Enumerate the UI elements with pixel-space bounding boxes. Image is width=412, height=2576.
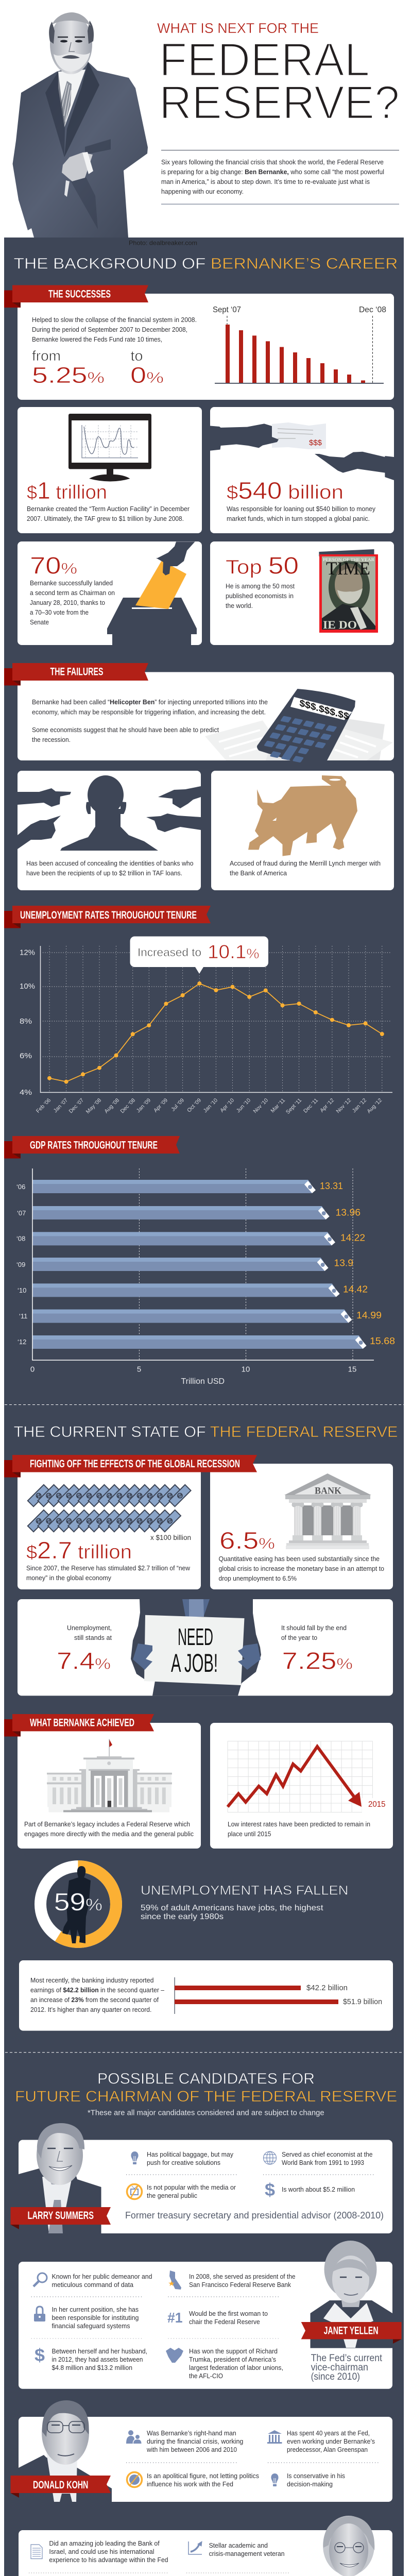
icon: TIME magazine cover: TIME	[326, 558, 370, 579]
panel: Larry Summers: Is not popular with the media or	[147, 2183, 236, 2191]
panel: rate cuts: 0%	[130, 363, 164, 388]
icon: no politics	[127, 2472, 142, 2487]
panel: Donald Kohn: Was Bernanke’s right-hand man	[147, 2429, 236, 2437]
bar chart: falling rate: Dec ‘08	[359, 306, 386, 314]
bar chart: falling rate: Sept ‘07	[213, 306, 241, 314]
line chart: unemployment: Dec ‘08	[119, 1097, 136, 1114]
panel: Larry Summers: Has political baggage, but may	[147, 2150, 233, 2158]
ribbon: fighting off the effects: FIGHTING OFF THE EFFECTS OF THE GLOBAL RECESSION	[30, 1458, 240, 1470]
line chart: unemployment: Nov ‘12	[335, 1097, 352, 1114]
panel: low interest rates	[210, 1723, 393, 1849]
donut chart: 59%	[40, 1866, 116, 1943]
page title: FEDERAL	[159, 34, 370, 86]
panel: Larry Summers: the general public	[147, 2192, 197, 2199]
panel: Donald Kohn: influence his work with the Fed	[147, 2480, 233, 2488]
bar chart: GDP: ‘08	[16, 1235, 25, 1243]
icon: calculator on papers	[205, 689, 393, 765]
panel: Janet Yellen: Known for her public demeanor and	[52, 2273, 152, 2280]
photo credit: Photo: dealbreaker.com	[129, 239, 197, 246]
intro text: happening with our economy.	[161, 188, 244, 195]
bar chart: GDP: 14.42	[343, 1284, 368, 1295]
bar chart: falling rate	[213, 306, 386, 384]
panel: top 50: Top 50	[226, 552, 299, 579]
icon: two people	[126, 2430, 141, 2444]
intro text: Six years following the financial crisis that shook the world, the Federal Reserve	[161, 159, 384, 166]
panel: $540 billion	[210, 407, 394, 533]
line chart: unemployment: 12%	[20, 948, 35, 957]
panel: $2.7 trillion: money” in the global economy	[26, 1574, 112, 1582]
icon: charging bull	[248, 775, 357, 856]
line chart: unemployment: Apr ‘09	[152, 1097, 169, 1114]
panel: rate cuts: from	[32, 348, 61, 364]
bar chart: GDP: 13.9	[334, 1258, 353, 1268]
panel: accused of concealing banks	[18, 771, 201, 890]
panel: accused of fraud	[211, 771, 394, 890]
text: unemployment has fallen: since the early 1980s	[141, 1912, 224, 1921]
panel: Donald Kohn: even working under Bernanke’s	[287, 2437, 375, 2445]
line chart: unemployment: Oct ‘09	[186, 1097, 202, 1114]
panel: rate cuts: Helped to slow the collapse of the financial system in 2008.	[32, 316, 197, 324]
line chart: unemployment: 8%	[20, 1017, 32, 1026]
icon: california map with star: ★	[168, 2279, 175, 2287]
panel: need a job	[18, 1599, 393, 1696]
panel: Donald Kohn: during the financial crisis, working	[147, 2437, 243, 2445]
callout: increased to 10.1%	[130, 937, 268, 974]
line chart: interest rate zigzag: 2015	[368, 1800, 386, 1809]
icon: growth chart	[188, 2541, 202, 2554]
panel: 70% vote	[18, 541, 202, 645]
section heading: candidates: FUTURE CHAIRMAN OF THE FEDERAL RESERVE	[15, 2088, 398, 2105]
bar chart: GDP: 5	[137, 1365, 141, 1374]
panel: banking earnings: Most recently, the banking industry reported	[30, 1977, 154, 1984]
icon: globe	[264, 2151, 276, 2164]
text: unemployment has fallen: UNEMPLOYMENT HAS FALLEN	[141, 1884, 348, 1898]
panel: top 50: the world.	[226, 602, 253, 609]
panel: Janet Yellen: In her current position, she has	[52, 2306, 139, 2313]
panel: 6.5%: 6.5 %	[219, 1527, 275, 1554]
ribbon: what bernanke achieved	[4, 1714, 154, 1736]
panel: Janet Yellen: financial safeguard systems	[52, 2322, 130, 2330]
panel: Janet Yellen: largest federation of labor unions,	[189, 2364, 283, 2371]
panel: need a job: of the year to	[281, 1634, 317, 1641]
panel: need a job: still stands at	[74, 1634, 112, 1641]
panel: rate cuts	[18, 294, 394, 400]
panel: 70% vote: Senate	[30, 619, 49, 626]
panel: banking earnings: an increase of 23% from the second quarter of	[30, 1996, 159, 2004]
panel: accused of fraud: Accused of fraud during the Merrill Lynch merger with	[230, 860, 381, 867]
icon: dollar sign: $	[265, 2180, 275, 2200]
icon: institution	[267, 2430, 282, 2444]
icon: check exchanged between hands: $$$	[309, 438, 322, 447]
line chart: unemployment: Apr ‘10	[219, 1097, 235, 1114]
line chart: unemployment: Jan ‘10	[202, 1097, 219, 1114]
panel: 6.5%: Quantitative easing has been used substantially since the	[218, 1555, 380, 1563]
panel: need a job: 7.25 %	[282, 1648, 353, 1674]
bar chart: GDP: 13.31	[320, 1181, 343, 1191]
panel: Janet Yellen: $4.8 million and $13.2 million	[52, 2364, 132, 2371]
bar chart: earnings	[174, 1977, 382, 2014]
icon: TIME magazine cover: IE DO	[323, 618, 357, 631]
panel: Janet Yellen: San Francisco Federal Reserve Bank	[189, 2281, 291, 2289]
panel: Janet Yellen: (since 2010)	[311, 2371, 360, 2382]
panel: Janet Yellen: been responsible for instituting	[52, 2314, 139, 2321]
ribbon: Donald Kohn name	[10, 2476, 111, 2498]
line chart: unemployment: Aug ‘12	[366, 1097, 383, 1114]
panel: accused of concealing banks: have been the recipients of up to $2 trillion in TAF loans.	[26, 870, 182, 877]
panel: Janet Yellen: Trumka, president of America’s	[189, 2355, 276, 2363]
icon: ballot box	[107, 541, 197, 645]
line chart: unemployment: Jul ‘09	[170, 1097, 185, 1113]
panel: $1 trillion: 2007. Ultimately, the TAF grew to $1 trillion by June 2008.	[27, 515, 184, 522]
panel: Janet Yellen: chair the Federal Reserve	[189, 2318, 260, 2326]
icon: money notes	[28, 1485, 191, 1532]
line chart: unemployment: 4%	[20, 1088, 32, 1097]
panel: Donald Kohn: predecessor, Alan Greenspan	[287, 2446, 368, 2453]
panel: need a job: It should fall by the end	[281, 1624, 347, 1632]
line chart: unemployment: Apr ‘12	[319, 1097, 335, 1114]
ribbon: the failures: THE FAILURES	[50, 666, 103, 678]
section heading: candidates	[15, 2070, 398, 2117]
panel: rate cuts: to	[131, 348, 143, 364]
ribbon: Larry Summers name: LARRY SUMMERS	[28, 2210, 94, 2222]
ribbon: gdp rates: GDP RATES THROUGHOUT TENURE	[30, 1139, 158, 1151]
callout: increased to 10.1%: 10.1%	[208, 941, 260, 962]
icon: TIME magazine cover	[319, 549, 378, 633]
icon: monitor with chart	[68, 414, 151, 481]
bar chart: GDP: ‘12	[18, 1338, 26, 1346]
icon: man holding sign: NEED	[178, 1623, 213, 1650]
ribbon: the successes: THE SUCCESSES	[48, 289, 111, 300]
ribbon: Donald Kohn name: DONALD KOHN	[33, 2479, 88, 2491]
icon: head silhouette with pointing hands	[18, 775, 201, 851]
panel: helicopter ben: economy, which may be responsible for triggering inflation, and increasing the debt.	[32, 709, 266, 716]
ribbon: the successes	[4, 285, 148, 308]
panel: Larry Summers: push for creative solutions	[147, 2159, 220, 2166]
ribbon: gdp rates	[4, 1136, 180, 1158]
icon: check exchanged between hands	[210, 422, 394, 480]
panel: rate cuts: 5.25 %	[32, 363, 105, 388]
icon: number one: #1	[167, 2310, 183, 2326]
panel: rate cuts: During the period of September 2007 to December 2008,	[32, 326, 187, 333]
panel: helicopter ben	[18, 672, 394, 765]
section heading: candidates: *These are all major candidates considered and are subject to change	[88, 2109, 324, 2117]
hero portrait: Ben Bernanke	[12, 12, 148, 238]
panel: Larry Summers: Is worth about $5.2 million	[282, 2185, 355, 2193]
bar chart: GDP: ‘07	[17, 1209, 26, 1217]
bar chart: GDP: 10	[242, 1365, 250, 1374]
panel: top 50	[210, 541, 394, 645]
line chart: unemployment: May ‘08	[85, 1097, 102, 1115]
panel: accused of fraud: the Bank of America	[230, 870, 287, 877]
icon: federal reserve building	[47, 1739, 172, 1812]
portrait: Janet Yellen	[310, 2241, 392, 2348]
line chart: unemployment: Dec ‘07	[67, 1097, 85, 1114]
panel: $540 billion: market funds, which in turn stopped a global panic.	[227, 515, 370, 522]
panel: 70% vote: Bernanke successfully landed	[30, 580, 113, 587]
ribbon: the failures	[4, 663, 148, 685]
icon: no television	[127, 2184, 142, 2199]
panel: Donald Kohn	[10, 2400, 392, 2502]
bar chart: GDP: 15.68	[370, 1336, 395, 1346]
icon: man holding sign	[131, 1599, 261, 1696]
panel: 6.5%: drop unemployment to 6.5%	[218, 1575, 297, 1582]
portrait: Larry Summers	[19, 2123, 101, 2233]
panel: Janet Yellen: the AFL-CIO	[189, 2372, 223, 2380]
panel: Larry Summers: Former treasury secretary and presidential advisor (2008-2010)	[125, 2210, 384, 2221]
line chart: unemployment: Jan ‘09	[135, 1097, 152, 1114]
panel: $1 trillion	[18, 407, 202, 533]
panel: $2.7 trillion: $2.7 trillion	[26, 1537, 132, 1564]
text: unemployment has fallen	[141, 1884, 348, 1921]
line chart: unemployment	[20, 937, 392, 1115]
line chart: unemployment: Mar ‘11	[269, 1097, 286, 1114]
line chart: unemployment: Jun ‘10	[235, 1097, 252, 1114]
panel: Donald Kohn: decision-making	[287, 2480, 333, 2488]
panel: Janet Yellen: Would be the first woman to	[189, 2310, 268, 2317]
icon: calculator on papers: $$$.$$$.$$	[299, 698, 350, 722]
panel: Stanley Fischer: Did an amazing job leading the Bank of	[49, 2539, 160, 2547]
icon: TIME magazine cover: PERSON OF THE YEAR	[323, 557, 374, 562]
panel: helicopter ben: Bernanke had been called “Helicopter Ben” for injecting unreported trillions into the	[32, 699, 268, 706]
panel: Stanley Fischer: Stellar academic and	[209, 2541, 268, 2549]
bar chart: GDP: ‘11	[19, 1312, 27, 1320]
icon: dollar sign: $	[35, 2346, 45, 2365]
ribbon: fighting off the effects	[4, 1455, 257, 1478]
portrait: Donald Kohn	[19, 2400, 112, 2502]
bar chart: GDP	[16, 1168, 395, 1386]
bar chart: GDP: 13.96	[336, 1208, 360, 1218]
panel: $540 billion: $540 billion	[227, 477, 344, 504]
panel: $2.7 trillion	[18, 1464, 201, 1589]
icon: light bulb	[271, 2473, 279, 2486]
panel: $1 trillion: Bernanke created the “Term Auction Facility” in December	[27, 505, 190, 513]
ribbon: Janet Yellen name: JANET YELLEN	[324, 2325, 379, 2337]
panel: 70% vote: a 70–30 vote from the	[30, 609, 89, 616]
panel: Janet Yellen	[19, 2241, 402, 2389]
panel: banking earnings	[19, 1960, 393, 2031]
bar chart: GDP: 15	[348, 1365, 356, 1374]
intro text: is preparing for a big change: Ben Bernanke, who some call “the most powerful	[161, 168, 384, 176]
donut chart: 59%: 59 %	[54, 1889, 102, 1916]
ribbon: unemployment rates: UNEMPLOYMENT RATES THROUGHOUT TENURE	[20, 909, 197, 921]
panel: top 50: He is among the 50 most	[226, 583, 295, 590]
bar chart: GDP: 14.99	[356, 1310, 382, 1320]
panel: Janet Yellen: vice-chairman	[311, 2362, 368, 2373]
panel: Janet Yellen: Between herself and her husband,	[52, 2347, 147, 2355]
panel: Stanley Fischer: crisis-management veteran	[209, 2550, 284, 2557]
bar chart: GDP: ‘06	[16, 1183, 25, 1191]
line chart: unemployment: Feb ‘06	[35, 1097, 52, 1114]
panel: need a job: Unemployment,	[67, 1624, 112, 1632]
text: unemployment has fallen: 59% of adult Americans have jobs, the highest	[141, 1904, 323, 1912]
icon: bank building	[284, 1473, 371, 1549]
panel: helicopter ben: the recession.	[32, 736, 71, 743]
intro text: man in America,” is about to step down. It’s time to re-evaluate just what is	[161, 178, 370, 185]
panel: Janet Yellen: In 2008, she served as president of the	[189, 2273, 296, 2280]
bar chart: GDP: Trillion USD	[181, 1377, 225, 1386]
panel: helicopter ben: Some economists suggest that he should have been able to predict	[32, 726, 219, 734]
line chart: interest rate zigzag	[228, 1741, 388, 1812]
ribbon: Larry Summers name	[10, 2207, 111, 2229]
line chart: unemployment: Sept ‘11	[285, 1097, 303, 1115]
panel: Janet Yellen: in 2012, they had assets between	[52, 2355, 143, 2363]
panel: Donald Kohn: with him between 2006 and 2010	[146, 2446, 237, 2453]
panel: Stanley Fischer	[19, 2516, 402, 2576]
panel: $540 billion: Was responsible for loaning out $540 billion to money	[227, 505, 376, 513]
icon: walking businessman silhouette	[62, 1866, 91, 1943]
panel: Larry Summers: Served as chief economist at the	[282, 2150, 373, 2158]
page title: RESERVE?	[159, 77, 400, 129]
line chart: unemployment: 6%	[20, 1052, 32, 1060]
section heading: candidates: POSSIBLE CANDIDATES FOR	[97, 2070, 315, 2088]
panel: Larry Summers	[10, 2123, 392, 2233]
panel: Donald Kohn: Is conservative in his	[287, 2472, 345, 2480]
ribbon: what bernanke achieved: WHAT BERNANKE ACHIEVED	[30, 1717, 134, 1729]
section heading: current state: THE CURRENT STATE OF THE FEDERAL RESERVE	[13, 1423, 398, 1440]
panel: need a job: 7.4 %	[57, 1648, 111, 1674]
bar chart: GDP: ‘10	[18, 1286, 26, 1294]
icon: bank building: BANK	[315, 1486, 341, 1497]
panel: Donald Kohn: Has spent 40 years at the Fed,	[287, 2429, 370, 2437]
panel: banking earnings: earnings of $42.2 billion in the second quarter –	[30, 1987, 164, 1994]
panel: low interest rates: place until 2015	[228, 1831, 271, 1838]
panel: Stanley Fischer: experience to his advantage within the Fed	[49, 2556, 168, 2564]
callout: increased to 10.1%: Increased to	[138, 946, 201, 959]
bar chart: earnings: $42.2 billion	[306, 1984, 348, 1992]
page title	[157, 20, 400, 129]
intro text	[161, 159, 384, 195]
section heading: background: THE BACKGROUND OF BERNANKE’S CAREER	[13, 256, 398, 272]
icon: california map with star	[168, 2270, 181, 2290]
panel: 6.5%: global crisis to increase the monetary base in an attempt to	[218, 1565, 384, 1572]
panel: federal reserve legacy: engages more directly with the media and the general public	[24, 1831, 194, 1838]
portrait: Stanley Fischer	[304, 2516, 392, 2576]
panel: 70% vote: 70 %	[30, 552, 77, 579]
panel: 6.5%	[210, 1464, 393, 1589]
panel: Janet Yellen: Has won the support of Richard	[189, 2347, 278, 2355]
panel: federal reserve legacy	[18, 1723, 201, 1849]
panel: low interest rates: Low interest rates have been predicted to remain in	[228, 1821, 370, 1828]
panel: $1 trillion: $1 trillion	[27, 477, 107, 504]
ribbon: Janet Yellen name	[301, 2322, 402, 2344]
panel: Larry Summers: World Bank from 1991 to 1993	[282, 2159, 364, 2166]
page title: WHAT IS NEXT FOR THE	[157, 20, 319, 36]
bar chart: GDP: 14.22	[340, 1233, 365, 1243]
panel: rate cuts: Bernanke lowered the Feds Fund rate 10 times,	[32, 336, 162, 343]
bar chart: GDP: ‘09	[16, 1261, 25, 1268]
panel: Stanley Fischer: Israel, and could use his international	[49, 2548, 154, 2555]
icon: handshake	[166, 2348, 183, 2363]
panel: top 50: published economists in	[226, 592, 294, 600]
panel: banking earnings: 2012. It’s higher than any quarter on record.	[30, 2006, 151, 2013]
line chart: unemployment: Jan ‘12	[351, 1097, 368, 1114]
panel: $2.7 trillion: Since 2007, the Reserve has stimulated $2.7 trillion of “new	[26, 1565, 191, 1572]
panel: 70% vote: January 28, 2010, thanks to	[30, 599, 105, 606]
icon: magnifier	[33, 2273, 47, 2286]
icon: padlock	[34, 2307, 45, 2321]
panel: federal reserve legacy: Part of Bernanke’s legacy includes a Federal Reserve which	[24, 1821, 190, 1828]
panel: accused of concealing banks: Has been accused of concealing the identities of banks who	[26, 860, 194, 867]
icon: man holding sign: A JOB!	[171, 1649, 218, 1677]
line chart: unemployment: Jan ‘07	[53, 1097, 69, 1114]
icon: document	[31, 2545, 42, 2558]
panel: Donald Kohn: Is an apolitical figure, not letting politics	[147, 2472, 259, 2480]
bar chart: GDP: 0	[30, 1365, 35, 1374]
panel: 70% vote: a second term as Chairman on	[30, 589, 115, 597]
line chart: unemployment: Dec ‘11	[302, 1097, 319, 1114]
panel: Janet Yellen: meticulous command of data	[52, 2281, 134, 2289]
panel: Janet Yellen: The Fed’s current	[311, 2353, 383, 2364]
panel: $2.7 trillion: x $100 billion	[150, 1533, 191, 1541]
bar chart: earnings: $51.9 billion	[343, 1997, 382, 2006]
icon: light bulb	[131, 2151, 139, 2164]
line chart: unemployment: 10%	[20, 982, 35, 991]
ribbon: unemployment rates	[4, 906, 211, 928]
line chart: unemployment: Aug ‘08	[103, 1097, 121, 1114]
line chart: unemployment: Nov ‘10	[252, 1097, 269, 1114]
